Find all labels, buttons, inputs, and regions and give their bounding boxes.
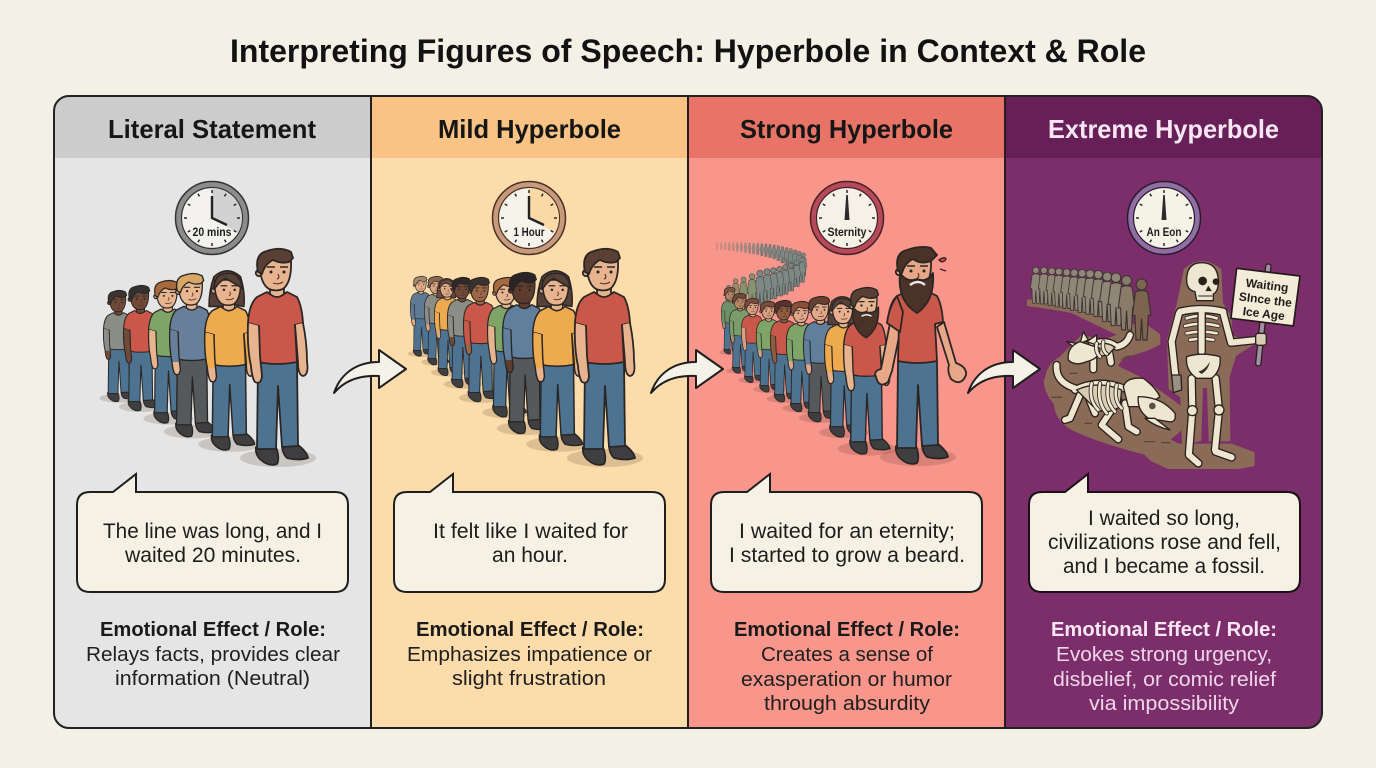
fossil scene [1028,262,1300,468]
panel: literal statement [77,114,348,690]
icon: clock eternity: Sternity [828,227,867,239]
text block: emotional effect extreme: via impossibility [1089,693,1239,715]
speech bubble: mild: It felt like I waited for [433,520,628,543]
panel backgrounds [54,96,1322,728]
text block: emotional effect strong: Emotional Effect / Role: [734,619,960,641]
title: Interpreting Figures of Speech: Hyperbole in Context & Role [230,33,1146,69]
small animal and triceratops skeletons [1057,332,1175,439]
text block: emotional effect literal: Relays facts, provides clear [86,644,340,666]
text block: emotional effect strong: through absurdity [764,693,930,715]
icon: clock 20 mins: 20 mins [192,227,232,239]
speech bubble: strong: I waited for an eternity; [739,520,955,543]
panel: extreme hyperbole [1028,114,1300,715]
mud ground [1028,301,1253,468]
speech bubble: extreme: and I became a fossil. [1063,555,1265,578]
skeleton with sign [1172,263,1300,463]
winding distant queue [716,242,807,308]
heading: literal statement: Literal Statement [108,114,316,144]
text block: emotional effect strong: exasperation or humor [741,669,952,691]
text block: emotional effect extreme: Evokes strong urgency, [1056,644,1272,666]
mud halo around skeleton [1168,262,1253,443]
icon: clock 1 hour [492,182,566,254]
sign: Waiting [1245,276,1289,295]
queue of nine people [407,249,643,467]
sign: SInce the [1238,289,1293,310]
sign post [1258,267,1268,363]
queue of six people [99,249,316,467]
arrow: literal to mild [334,350,406,393]
text block: emotional effect mild [407,619,652,690]
text block: emotional effect strong [734,619,960,715]
sign: Ice Age [1242,304,1286,323]
arrow: strong to extreme [968,350,1040,393]
heading: extreme hyperbole: Extreme Hyperbole [1048,114,1279,144]
icon: clock 20 mins [176,182,248,254]
icon: clock an eon [1128,182,1200,254]
text block: emotional effect literal: Emotional Effect / Role: [100,619,326,641]
text block: emotional effect literal: information (Neutral) [115,668,310,690]
speech bubble: mild [394,474,665,592]
speech bubble: mild: an hour. [492,544,568,567]
text block: emotional effect extreme [1051,619,1277,715]
icon: clock 1 hour: 1 Hour [514,227,545,239]
text block: emotional effect extreme: Emotional Effect / Role: [1051,619,1277,641]
speech bubble: literal: waited 20 minutes. [124,544,301,567]
speech bubble: strong: I started to grow a beard. [729,544,965,567]
text block: emotional effect extreme: disbelief, or comic relief [1053,669,1276,691]
speech bubble: strong [711,474,982,592]
text block: emotional effect literal [86,619,340,690]
speech bubble: literal [77,474,348,592]
distant silhouette line [1030,267,1151,340]
icon: clock eternity [810,182,884,254]
front person [567,249,643,467]
icon: clock an eon: An Eon [1146,227,1182,239]
front bearded person with raised hands [875,247,966,466]
front person [240,249,316,467]
panel: strong hyperbole [711,114,982,715]
panel: mild hyperbole [394,114,665,690]
speech bubble: extreme [1029,474,1300,592]
heading: strong hyperbole: Strong Hyperbole [740,114,953,144]
text block: emotional effect strong: Creates a sense of [761,644,933,666]
text block: emotional effect mild: slight frustration [452,668,606,690]
speech bubble: extreme: I waited so long, [1088,507,1240,530]
sign [1231,268,1300,326]
text block: emotional effect mild: Emotional Effect / Role: [416,619,644,641]
arrow: mild to strong [651,350,723,393]
text block: emotional effect mild: Emphasizes impatience or [407,644,652,666]
speech bubble: extreme: civilizations rose and fell, [1048,531,1281,554]
queue of bearded people [719,247,966,466]
heading: mild hyperbole: Mild Hyperbole [438,114,621,144]
speech bubble: literal: The line was long, and I [103,520,322,543]
